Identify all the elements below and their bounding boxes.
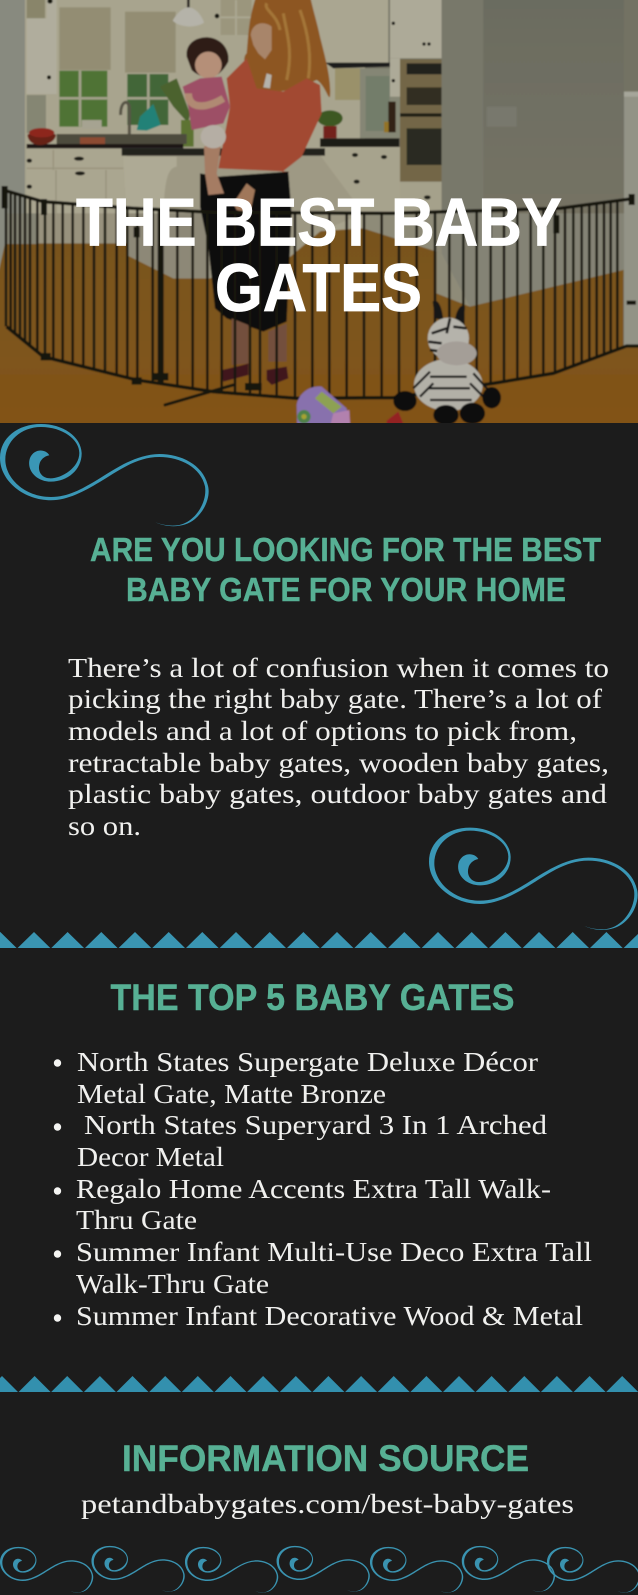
- text block: intro paragraph: retractable baby gates, wooden baby gates,: [68, 747, 609, 778]
- list text: North States Superyard 3 In 1 Arched: [84, 1109, 547, 1140]
- heading: are you looking: [90, 532, 601, 609]
- panel: hero photo with title: [0, 0, 638, 437]
- text block: intro paragraph: [68, 652, 609, 841]
- list text: Decor Metal: [77, 1141, 224, 1172]
- room: column and right wall: [437, 0, 638, 348]
- text block: intro paragraph: so on.: [68, 810, 141, 841]
- icon: top-left swirl ornament: [0, 424, 209, 526]
- figure: toy car: [295, 385, 404, 423]
- text block: intro paragraph: There’s a lot of confusion when it comes to: [68, 652, 609, 683]
- list text: Summer Infant Decorative Wood & Metal: [76, 1300, 583, 1331]
- list text: Regalo Home Accents Extra Tall Walk-: [76, 1173, 551, 1204]
- kitchen: hood, cabinets and oven: [317, 0, 442, 213]
- heading: the top 5 baby gates: THE TOP 5 BABY GATES: [110, 976, 514, 1018]
- icon: right swirl ornament: [429, 828, 638, 930]
- list text: Metal Gate, Matte Bronze: [77, 1078, 386, 1109]
- list bullets: [54, 1059, 61, 1322]
- text block: intro paragraph: models and a lot of options to pick from,: [68, 715, 577, 746]
- decoration: bottom swirl border: [0, 1546, 638, 1593]
- list text: Thru Gate: [76, 1204, 197, 1235]
- heading: are you looking: BABY GATE FOR YOUR HOME: [126, 572, 566, 609]
- photo: mother and child behind baby gate in a kitchen: [0, 0, 638, 437]
- title: THE BEST BABY: [76, 184, 562, 260]
- list text: [76, 1046, 592, 1331]
- divider: lower triangle band: [0, 1376, 638, 1392]
- text block: intro paragraph: plastic baby gates, outdoor baby gates and: [68, 778, 607, 809]
- list text: Walk-Thru Gate: [76, 1268, 269, 1299]
- kitchen: counter and lower cabinets: [27, 128, 187, 213]
- list text: Summer Infant Multi-Use Deco Extra Tall: [76, 1236, 592, 1267]
- title: GATES: [215, 250, 422, 326]
- photo darkening overlay: [0, 0, 638, 437]
- text block: intro paragraph: picking the right baby gate. There’s a lot of: [68, 683, 603, 714]
- kitchen: island: [122, 148, 363, 278]
- figure: gate bars and rails: [3, 186, 638, 405]
- text: source url: petandbabygates.com/best-baby-gates: [81, 1488, 574, 1519]
- figure: toddler: [183, 37, 230, 195]
- figure: zebra plush toy: [393, 301, 501, 425]
- floor: [0, 228, 638, 437]
- figure: mother: [200, 0, 330, 385]
- title: [76, 184, 562, 326]
- divider: upper triangle band: [0, 932, 638, 948]
- heading: information source: INFORMATION SOURCE: [122, 1437, 529, 1479]
- list: top five gates: [54, 1046, 592, 1331]
- kitchen: upper cabinets and windows: [27, 0, 252, 147]
- list text: North States Supergate Deluxe Décor: [77, 1046, 538, 1077]
